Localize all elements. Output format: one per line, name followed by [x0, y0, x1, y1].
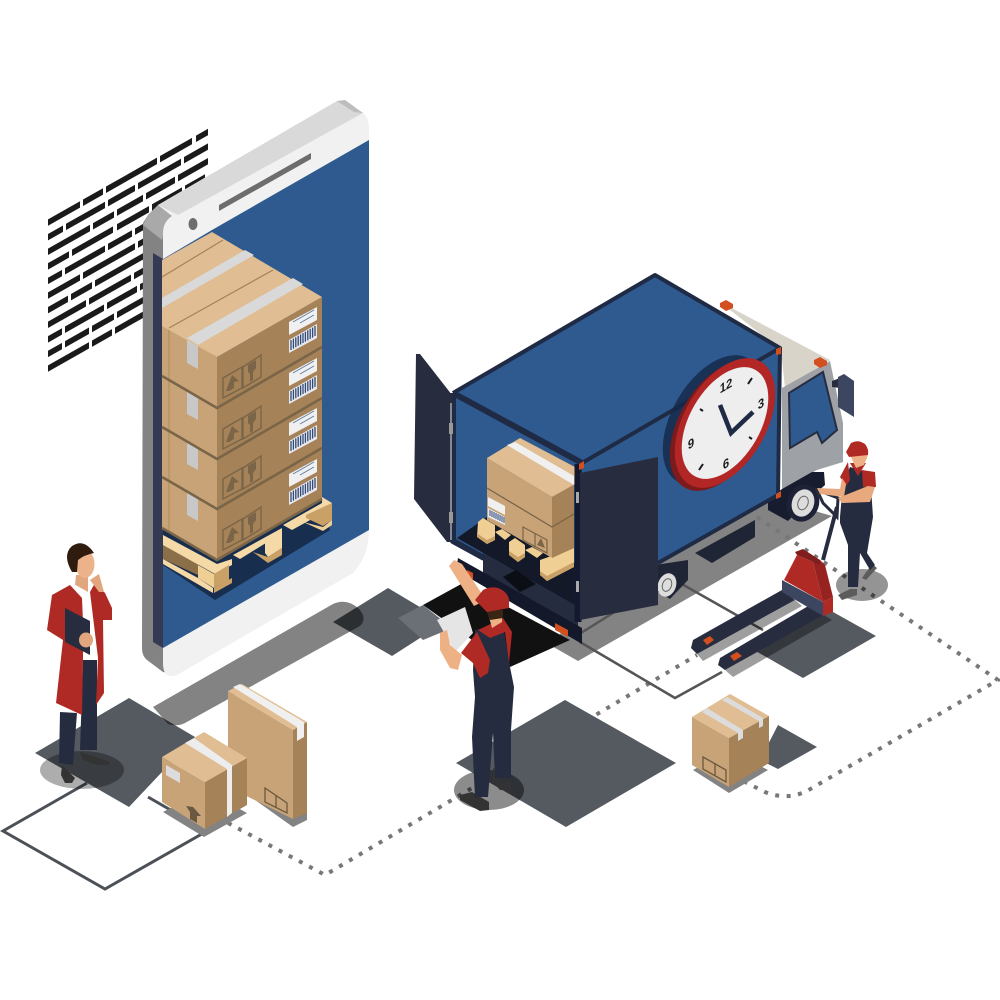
box right: [729, 716, 769, 787]
pallet middle base: [253, 548, 282, 563]
clock rim side: [670, 339, 770, 513]
box stack on phone: [162, 232, 322, 560]
top box face: [487, 438, 575, 497]
door hinges: [576, 492, 579, 592]
parcel in truck: [477, 438, 575, 581]
left door: [414, 354, 452, 542]
fork left: [691, 590, 795, 654]
face: [76, 550, 94, 578]
upper box left: [487, 458, 552, 527]
arm left: [817, 478, 846, 497]
small box arrow: [186, 806, 201, 823]
mirror arm: [832, 378, 840, 388]
dotted route: right: [743, 517, 998, 796]
box tape: [702, 708, 743, 741]
outline square: centre right: [580, 583, 763, 698]
pallet on phone screen: [163, 497, 332, 600]
clock numbers: [688, 374, 764, 473]
handle grip: [817, 490, 838, 517]
worker centre: [437, 560, 514, 811]
clock numbers: 3: [758, 394, 764, 413]
clock numbers: 9: [688, 434, 694, 453]
floor tile: central: [456, 700, 676, 827]
tape back: [162, 250, 254, 308]
red body left: [784, 555, 823, 602]
dotted route: left: [228, 655, 697, 875]
lower arm: [440, 630, 462, 670]
pallet shadow: [163, 500, 330, 600]
clock ticks: [699, 378, 752, 470]
interior back wall: [453, 393, 582, 610]
hand on tablet: [79, 632, 93, 648]
overalls: [840, 467, 875, 587]
base: [782, 580, 823, 616]
pallet corner block shade: [214, 565, 229, 588]
phone side: [142, 205, 177, 675]
floor tile: mid left: [333, 588, 445, 656]
pallet top plank: [163, 535, 232, 574]
tall box top: [228, 684, 307, 730]
raised arm: [449, 560, 486, 606]
bumper bar: [456, 558, 582, 644]
neck: [75, 575, 88, 594]
pallet left panel: [163, 540, 198, 575]
cab side: [782, 361, 843, 489]
tall box left face: [228, 691, 293, 819]
pallet right base: [303, 520, 332, 531]
tall box shadow: [248, 780, 307, 827]
clock face: [682, 348, 768, 498]
battery box: [695, 520, 755, 563]
neck: [487, 610, 502, 628]
truck pallet shade: [477, 534, 574, 581]
mirror: [838, 374, 854, 417]
pallet middle plank: [233, 528, 282, 559]
label: [488, 497, 505, 515]
truck pallet plank 2: [525, 547, 543, 558]
box side panel: [580, 348, 780, 610]
floor tile: under pallet jack: [745, 612, 876, 678]
boots: [838, 564, 877, 600]
small box label: [166, 765, 180, 783]
cab lights: [720, 300, 827, 368]
fork shadow: [697, 600, 832, 677]
interior floor: [457, 517, 578, 607]
box pictograms: [703, 757, 726, 782]
phone navy strip: [153, 253, 163, 648]
hair: [67, 543, 94, 572]
post corner light: [579, 461, 584, 470]
chassis: [483, 553, 578, 628]
rear wheel: [654, 571, 680, 599]
floor tile: lighter overlap: [398, 605, 452, 640]
sleeve right: [862, 470, 876, 487]
pictograms: [523, 527, 547, 553]
paper: [437, 607, 473, 652]
box 3: [162, 398, 322, 509]
pallet middle block: [265, 531, 282, 557]
coat: [47, 583, 112, 715]
helmet: [846, 441, 868, 457]
outline square: left: [3, 783, 207, 889]
small box left: [162, 757, 205, 829]
pallet jack: [691, 490, 838, 677]
small box right: [205, 758, 247, 829]
phone corner highlight: [143, 205, 178, 240]
fork tips: [703, 636, 742, 661]
shadow: worker centre: [454, 770, 524, 810]
phone stand band: [153, 602, 364, 725]
boxes foreground left: [162, 684, 307, 837]
phone top band: [158, 101, 363, 215]
box roof: [453, 275, 780, 463]
clock shadow: [663, 333, 763, 507]
seam: [487, 488, 574, 527]
phone face: [158, 101, 369, 676]
truck: [414, 275, 854, 644]
brick pattern behind phone: [48, 132, 208, 369]
seam lines: [162, 240, 273, 328]
pallet corner base: [214, 578, 232, 593]
box 4: [162, 449, 322, 560]
stack top face: [162, 232, 322, 357]
chassis cavity: [503, 570, 536, 592]
small box top: [162, 732, 247, 782]
lower box left: [487, 488, 552, 558]
floor tile: left: [35, 698, 195, 807]
phone screen: [163, 140, 369, 648]
upper box right: [552, 484, 574, 527]
barcode: [488, 508, 505, 525]
shadow: truck ground: [550, 498, 832, 661]
floor: black shadow under truck tail: [423, 583, 570, 667]
clock numbers: 12: [720, 374, 732, 397]
box 1: [162, 297, 322, 408]
legs: [59, 660, 97, 765]
helmet: [475, 587, 509, 612]
bumper reflector: [555, 623, 568, 637]
box top: [692, 694, 769, 738]
tall box right face: [293, 722, 307, 819]
lower box right: [552, 514, 574, 558]
rear tyre: [655, 560, 688, 599]
small box shadow: [163, 790, 247, 837]
pallet right plank: [283, 497, 332, 530]
tall box tape: [233, 684, 304, 741]
hair: [486, 610, 503, 620]
face: [850, 455, 868, 468]
red body base: [823, 597, 833, 616]
roof edge frame: [453, 275, 780, 563]
cab roof: [720, 302, 830, 388]
left door edge strip: [450, 403, 452, 540]
man with tablet: [47, 543, 112, 783]
barcode bars: [490, 510, 504, 523]
floor tile: right box: [760, 725, 817, 769]
frame corners: [776, 347, 781, 499]
pallet bottom plank: [163, 559, 213, 593]
shadow: worker right: [836, 569, 888, 601]
hood red: [478, 618, 512, 663]
handle: [823, 507, 837, 560]
rear opening frame: [453, 393, 582, 558]
left door hinges: [449, 423, 453, 523]
overalls: [472, 625, 514, 797]
box 2: [162, 348, 322, 459]
chassis front block: [768, 472, 825, 521]
truck pallet block 1: [477, 518, 495, 544]
pictogram arrow: [537, 538, 545, 548]
red body right: [813, 560, 833, 602]
box tape 2: [722, 697, 763, 728]
boots: [460, 767, 511, 811]
cab window: [789, 372, 837, 448]
tape: [507, 442, 574, 485]
truck pallet block 2: [509, 538, 525, 562]
clock: [663, 333, 775, 513]
right door: [580, 457, 658, 620]
collar: [850, 463, 866, 476]
smartphone: [142, 100, 369, 676]
fork right: [718, 605, 824, 670]
clock numbers: 6: [723, 454, 729, 473]
hand at chin: [90, 574, 104, 592]
truck pallet plank 1: [495, 529, 511, 540]
door post: [574, 464, 582, 622]
worker right: [817, 441, 877, 600]
clock hands: [720, 405, 753, 433]
phone camera: [188, 218, 198, 230]
small box tape: [185, 738, 232, 817]
pallet right block shade: [306, 503, 332, 526]
shirt: [72, 583, 98, 658]
arm right: [838, 486, 875, 503]
tablet: [65, 608, 90, 655]
pallet corner block light: [198, 565, 214, 588]
sleeve left: [840, 462, 850, 486]
truck pallet block 3: [540, 548, 574, 581]
shadow: man 1: [40, 751, 124, 789]
box foreground right: [692, 694, 769, 793]
front wheel: [781, 480, 825, 526]
phone speaker: [219, 153, 311, 211]
red body cap: [795, 549, 820, 565]
box shadow: [693, 750, 768, 793]
sleeve: [461, 632, 490, 678]
phone top corner: [337, 100, 363, 113]
tall box pictograms: [265, 788, 287, 813]
bumper end light: [467, 570, 473, 580]
tape front: [187, 278, 303, 345]
box left: [692, 717, 729, 787]
shoes: [61, 752, 110, 783]
clock rim: [675, 336, 775, 510]
